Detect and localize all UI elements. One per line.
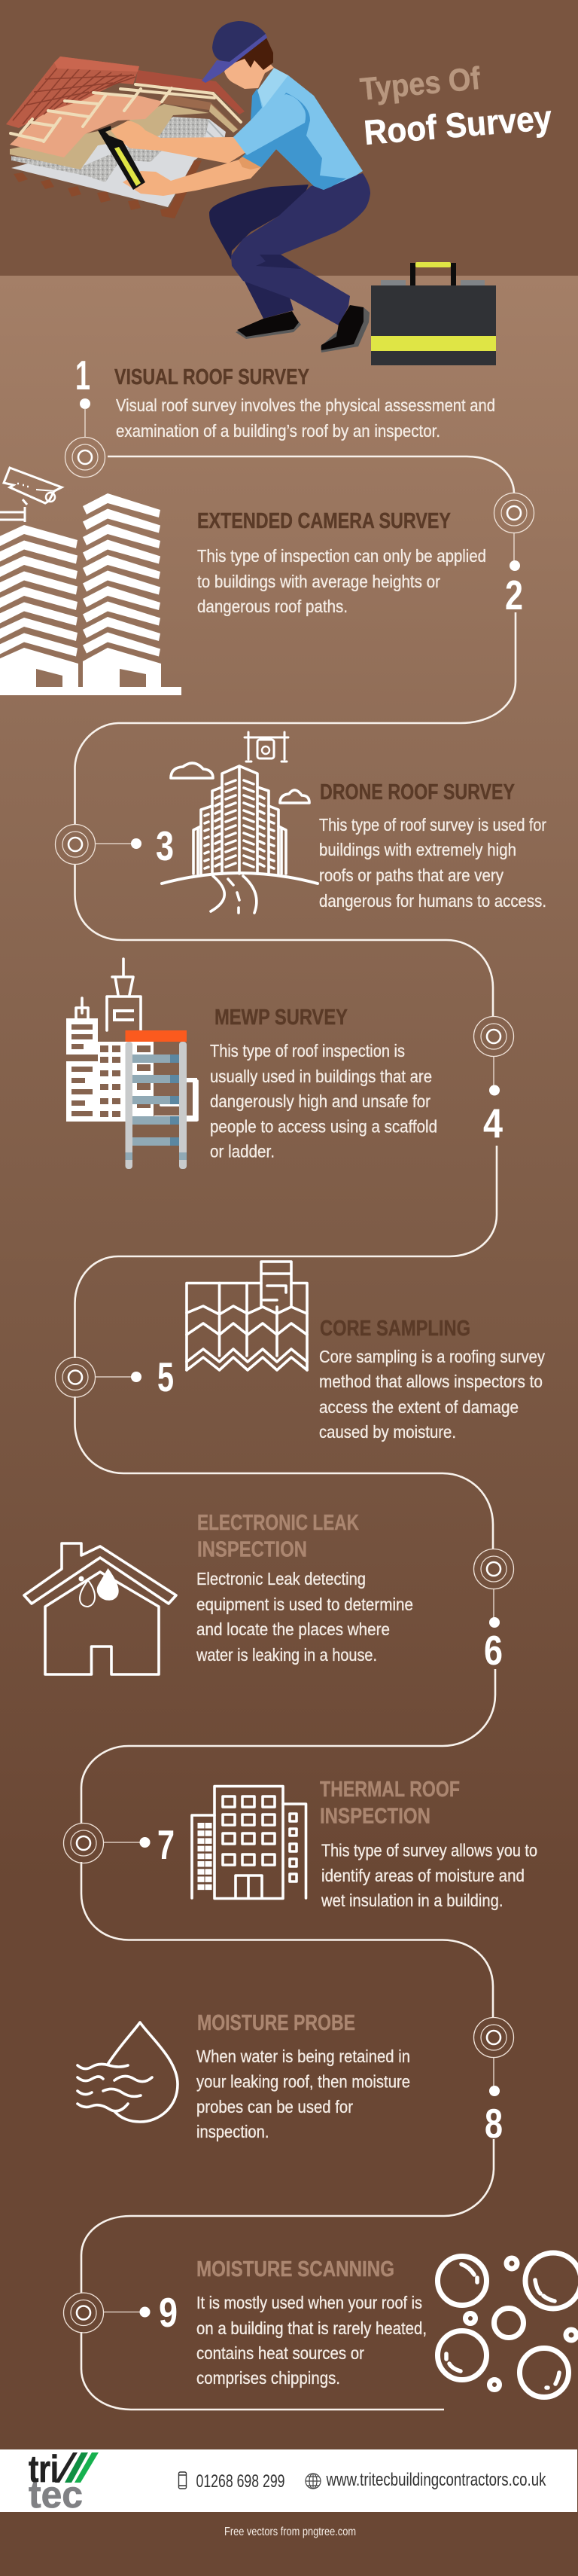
body text — [197, 546, 486, 616]
body text: contains heat sources or — [196, 2343, 364, 2363]
number 5: 5 — [157, 1354, 174, 1400]
contact: website — [306, 2470, 546, 2490]
body text: dangerous roof paths. — [197, 597, 348, 616]
logo: tri tec — [29, 2448, 99, 2516]
panel: moisture scanning — [63, 2253, 578, 2397]
body text: or ladder. — [210, 1142, 275, 1161]
roof back tiles — [135, 70, 245, 114]
node 4 — [474, 1017, 513, 1095]
body text: This type of inspection can only be applied — [197, 546, 486, 566]
body text: wet insulation in a building. — [321, 1891, 503, 1910]
logo word: tri: tri — [29, 2448, 59, 2490]
body text — [210, 1041, 437, 1161]
node 1 — [65, 398, 105, 478]
roof brown layer — [161, 94, 239, 130]
node 7 — [63, 1823, 151, 1863]
inspector upper arm — [111, 121, 246, 163]
body text: access the extent of damage — [319, 1397, 519, 1417]
number 6: 6 — [484, 1627, 503, 1674]
number 4: 4 — [483, 1100, 503, 1146]
logo word: tec: tec — [29, 2474, 83, 2516]
inspector lower arm — [123, 157, 261, 196]
number 8: 8 — [485, 2100, 503, 2147]
icon: bubbles — [438, 2253, 578, 2397]
body text: This type of roof survey is used for — [319, 815, 546, 835]
body text: inspection. — [196, 2122, 269, 2141]
body text: on a building that is rarely heated, — [196, 2318, 427, 2338]
hero illustration: inspector holding a roof section — [6, 21, 496, 365]
panel: extended camera survey — [0, 468, 534, 695]
roof ridge — [54, 56, 139, 72]
heading: INSPECTION — [320, 1805, 430, 1829]
icon: towers with security camera — [0, 468, 181, 695]
footer bar — [0, 2449, 577, 2512]
node 5 — [56, 1357, 141, 1397]
body text: Electronic Leak detecting — [196, 1569, 366, 1589]
heading: MOISTURE PROBE — [197, 2011, 355, 2035]
inspector cap — [202, 21, 267, 83]
icon: roof tiles — [187, 1262, 307, 1370]
number 7: 7 — [157, 1821, 175, 1868]
body text: identify areas of moisture and — [321, 1866, 525, 1885]
heading: EXTENDED CAMERA SURVEY — [197, 509, 451, 533]
connector path — [75, 456, 516, 2410]
panel: MEWP survey — [66, 959, 513, 1169]
body text: This type of roof inspection is — [210, 1041, 405, 1061]
number 2: 2 — [505, 572, 523, 618]
node 3 — [56, 824, 141, 865]
number 3: 3 — [156, 823, 174, 869]
heading: ELECTRONIC LEAK — [197, 1511, 359, 1535]
body text — [196, 2046, 410, 2141]
body text — [319, 815, 546, 911]
inspector shoes — [236, 305, 370, 353]
title line: Roof Survey: Roof Survey — [363, 98, 553, 152]
body text: dangerously high and unsafe for — [210, 1091, 430, 1111]
panel: core sampling — [56, 1262, 545, 1442]
title line: Types Of: Types Of — [358, 60, 482, 107]
number 1: 1 — [75, 352, 90, 398]
roof rafters — [14, 139, 218, 218]
icon: water drop with waves — [78, 2022, 178, 2122]
heading — [320, 1778, 460, 1829]
body text: equipment is used to determine — [196, 1595, 413, 1614]
body text: This type of survey allows you to — [321, 1841, 537, 1860]
body text: buildings with extremely high — [319, 840, 516, 859]
body text — [196, 2293, 427, 2388]
roof insulation layer — [11, 117, 209, 182]
node 2 — [494, 493, 534, 571]
inspector sleeve — [233, 94, 306, 155]
body text: usually used in buildings that are — [210, 1067, 432, 1086]
icon: globe — [306, 2474, 321, 2489]
roofing tool — [98, 126, 145, 190]
phone number: 01268 698 299 — [196, 2471, 284, 2492]
heading: MEWP SURVEY — [214, 1006, 348, 1030]
inspector face — [224, 53, 274, 89]
icon: city with ladder — [66, 959, 197, 1169]
body text: comprises chippings. — [196, 2368, 340, 2388]
node 6 — [474, 1549, 513, 1628]
body text: It is mostly used when your roof is — [196, 2293, 422, 2312]
body text: your leaking roof, then moisture — [196, 2071, 410, 2091]
background: upper wall — [0, 0, 578, 276]
node 9 — [63, 2293, 151, 2333]
panel: moisture probe — [78, 2011, 513, 2147]
panel: drone roof survey — [56, 732, 546, 913]
toolbox — [371, 262, 496, 365]
roof sheet layer — [11, 119, 226, 207]
body text — [196, 1569, 413, 1665]
body text: method that allows inspectors to — [319, 1372, 543, 1391]
title — [358, 60, 553, 152]
roof board layer — [10, 104, 209, 169]
inspector trousers — [231, 173, 370, 325]
body text — [116, 395, 495, 441]
body text: dangerous for humans to access. — [319, 891, 546, 911]
heading: VISUAL ROOF SURVEY — [114, 365, 309, 389]
inspector hair — [231, 36, 273, 70]
heading — [197, 1511, 359, 1562]
heading: MOISTURE SCANNING — [196, 2257, 394, 2281]
icon: office building — [192, 1787, 306, 1898]
body text: probes can be used for — [196, 2097, 353, 2117]
roof battens — [11, 84, 241, 142]
body text — [319, 1347, 545, 1442]
body text: roofs or paths that are very — [319, 865, 503, 885]
body text: people to access using a scaffold — [210, 1116, 437, 1136]
heading: INSPECTION — [197, 1538, 307, 1562]
body text: Core sampling is a roofing survey — [319, 1347, 545, 1366]
inspector back leg — [243, 256, 294, 319]
roof membrane layer — [10, 93, 163, 157]
roof front tiles — [6, 56, 139, 128]
icon: house with leak — [24, 1543, 176, 1674]
panel: thermal roof inspection — [63, 1778, 537, 1910]
icon: tower with drone and clouds — [162, 732, 318, 913]
contact: phone — [179, 2471, 284, 2492]
body text: to buildings with average heights or — [197, 572, 440, 591]
body text: caused by moisture. — [319, 1422, 456, 1442]
heading: DRONE ROOF SURVEY — [320, 780, 515, 804]
heading: CORE SAMPLING — [320, 1317, 470, 1341]
body text: examination of a building’s roof by an inspector. — [116, 421, 440, 441]
inspector rear thigh — [209, 185, 309, 260]
body text: When water is being retained in — [196, 2046, 410, 2066]
panel: electronic leak inspection — [24, 1511, 513, 1674]
inspector knee shading — [256, 255, 301, 269]
body text: Visual roof survey involves the physical assessment and — [116, 395, 495, 415]
number 9: 9 — [159, 2289, 178, 2336]
node 8 — [474, 2017, 513, 2096]
panel: visual roof survey — [65, 352, 495, 478]
body text: water is leaking in a house. — [196, 1645, 377, 1665]
inspector shirt — [233, 68, 363, 190]
body text — [321, 1841, 537, 1910]
icon: phone — [179, 2472, 187, 2489]
body text: and locate the places where — [196, 1619, 390, 1639]
credit line: Free vectors from pngtree.com — [224, 2526, 356, 2538]
heading: THERMAL ROOF — [320, 1778, 460, 1802]
logo slashes — [55, 2452, 99, 2483]
